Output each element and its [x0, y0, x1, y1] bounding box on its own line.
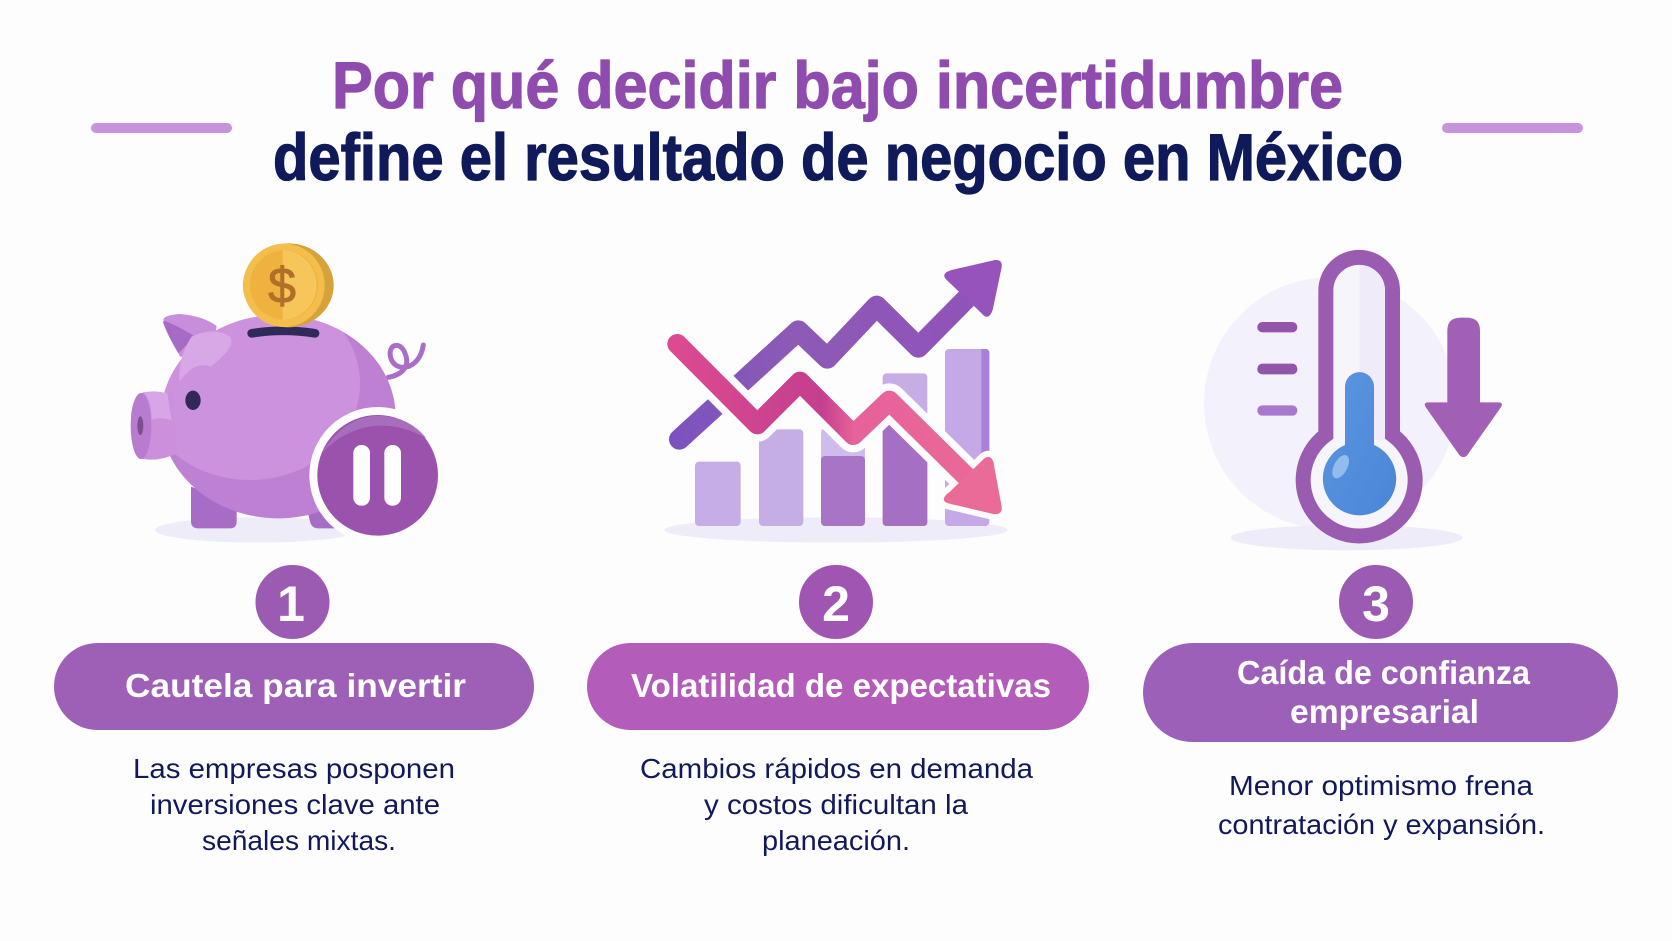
description 3: Menor optimismo frena — [1229, 770, 1533, 801]
pill: heading 3: empresarial — [1290, 693, 1479, 730]
description 2 — [640, 753, 1033, 856]
icon: thermometer with down arrow — [1204, 257, 1502, 550]
pill: heading 2: Volatilidad de expectativas — [631, 667, 1051, 704]
description 1: señales mixtas. — [202, 825, 396, 856]
title line 1: Por qué decidir bajo incertidumbre — [332, 48, 1343, 122]
title line 2: define el resultado de negocio en México — [273, 120, 1403, 194]
description 1: Las empresas posponen — [133, 753, 455, 784]
pill: heading 2 — [587, 643, 1089, 730]
title — [273, 48, 1403, 194]
pill: heading 1 — [54, 643, 534, 730]
step 2 — [587, 564, 1089, 856]
step 3 — [1143, 564, 1618, 840]
description 2: y costos dificultan la — [704, 789, 968, 820]
left title rule — [91, 123, 232, 133]
step 1 — [54, 564, 534, 856]
description 2: planeación. — [762, 825, 910, 856]
number badge 1: 1 — [277, 576, 305, 632]
icon: bar chart with rising and falling arrows — [664, 260, 1008, 543]
icon: piggy bank with coin and pause: $ — [268, 258, 296, 314]
number badge 3: 3 — [1362, 576, 1390, 632]
number badge 3 — [1338, 564, 1414, 640]
description 1 — [133, 753, 455, 856]
description 3 — [1218, 770, 1545, 840]
pill: heading 3 — [1143, 643, 1618, 742]
number badge 2: 2 — [822, 576, 850, 632]
right title rule — [1442, 123, 1583, 133]
number badge 1 — [254, 564, 330, 640]
pill: heading 1: Cautela para invertir — [125, 667, 466, 704]
icon: piggy bank with coin and pause — [131, 243, 446, 544]
description 1: inversiones clave ante — [150, 789, 440, 820]
number badge 2 — [798, 564, 874, 640]
description 3: contratación y expansión. — [1218, 809, 1545, 840]
pill: heading 3: Caída de confianza — [1237, 654, 1531, 691]
description 2: Cambios rápidos en demanda — [640, 753, 1033, 784]
